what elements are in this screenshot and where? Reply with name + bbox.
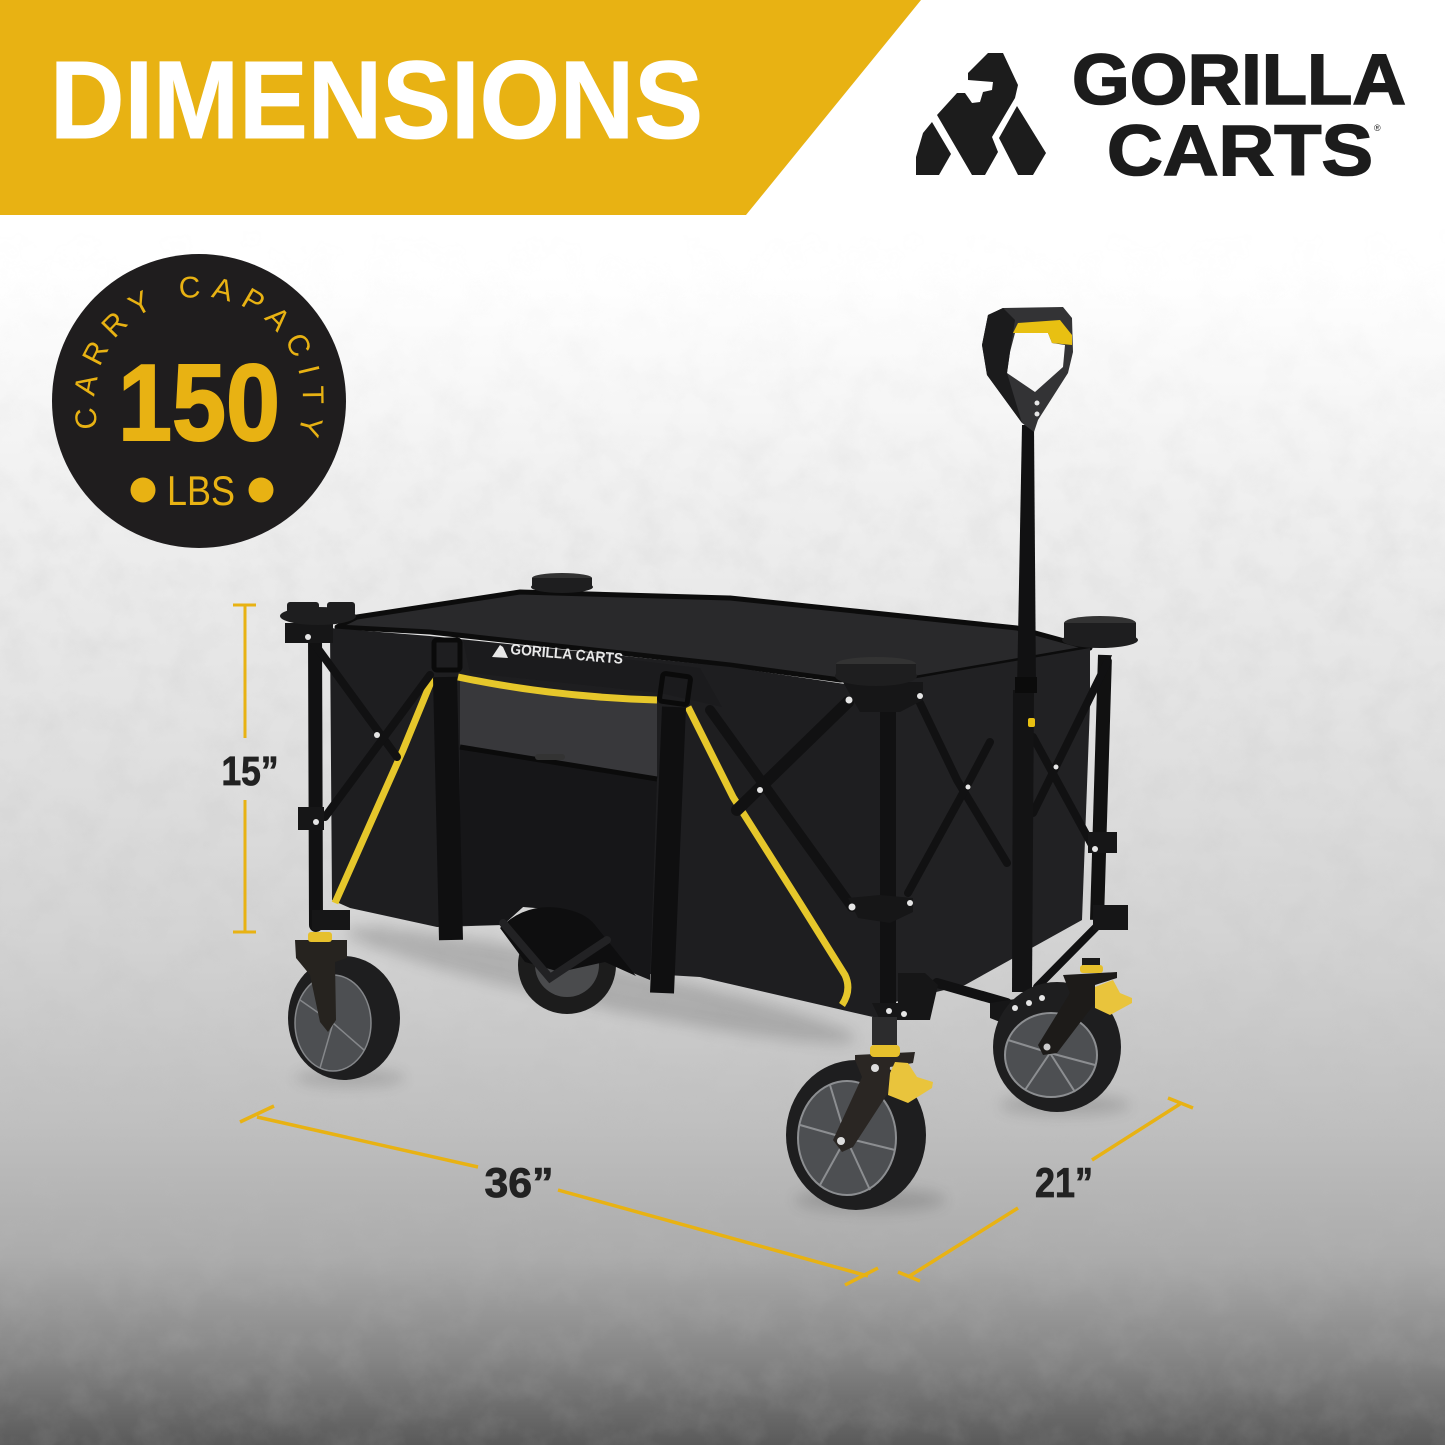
top band <box>463 640 722 707</box>
ground shadow <box>295 909 1130 1212</box>
strap buckles <box>434 640 691 705</box>
wheel: front left <box>288 932 400 1080</box>
dimension: length: 36” <box>484 1159 554 1206</box>
dimension: length <box>240 1106 878 1285</box>
brand logo <box>916 41 1406 191</box>
pull handle <box>982 307 1073 992</box>
title: DIMENSIONS <box>50 39 703 162</box>
badge number: 150 <box>118 342 280 464</box>
rear wheel fork <box>503 923 607 978</box>
pocket mesh <box>460 747 657 980</box>
badge caption: CARRY CAPACITY <box>75 276 324 438</box>
yellow piping <box>335 677 848 1005</box>
frame struts <box>313 630 1110 1020</box>
wagon illustration <box>280 307 1138 1212</box>
badge unit: LBS <box>167 467 235 514</box>
wheel: front right <box>786 1017 933 1210</box>
dimension: height: 15” <box>222 748 278 794</box>
wheel: back right <box>993 958 1132 1112</box>
far rear post <box>1097 655 1105 920</box>
pocket strap line <box>460 747 657 779</box>
badge unit <box>130 467 274 514</box>
icon: gorilla mark <box>916 53 1046 175</box>
frame brackets <box>285 623 1128 1022</box>
straps <box>445 677 674 993</box>
dimension: width <box>898 1098 1193 1281</box>
wheels <box>288 932 1132 1210</box>
concrete texture <box>40 1373 1445 1445</box>
rear wheel under basket <box>518 916 616 1014</box>
pocket toggle <box>535 754 565 760</box>
brand logo: ® <box>1374 123 1381 133</box>
basket interior <box>337 592 1090 680</box>
dimension: height <box>222 605 278 932</box>
short side fabric <box>888 648 1090 1002</box>
frame bolts <box>305 400 1117 1017</box>
wordmark: GORILLA <box>1072 41 1406 120</box>
corner cup holders <box>280 573 1138 686</box>
dimension: width: 21” <box>1035 1159 1093 1206</box>
brand logo: CARTS <box>1107 112 1373 191</box>
long side fabric <box>330 628 885 1018</box>
pocket upper <box>460 680 657 780</box>
notch shadow <box>500 907 636 976</box>
header banner <box>0 0 921 215</box>
badge: carry capacity <box>52 254 346 548</box>
brand label on wagon: GORILLA CARTS <box>510 641 624 668</box>
